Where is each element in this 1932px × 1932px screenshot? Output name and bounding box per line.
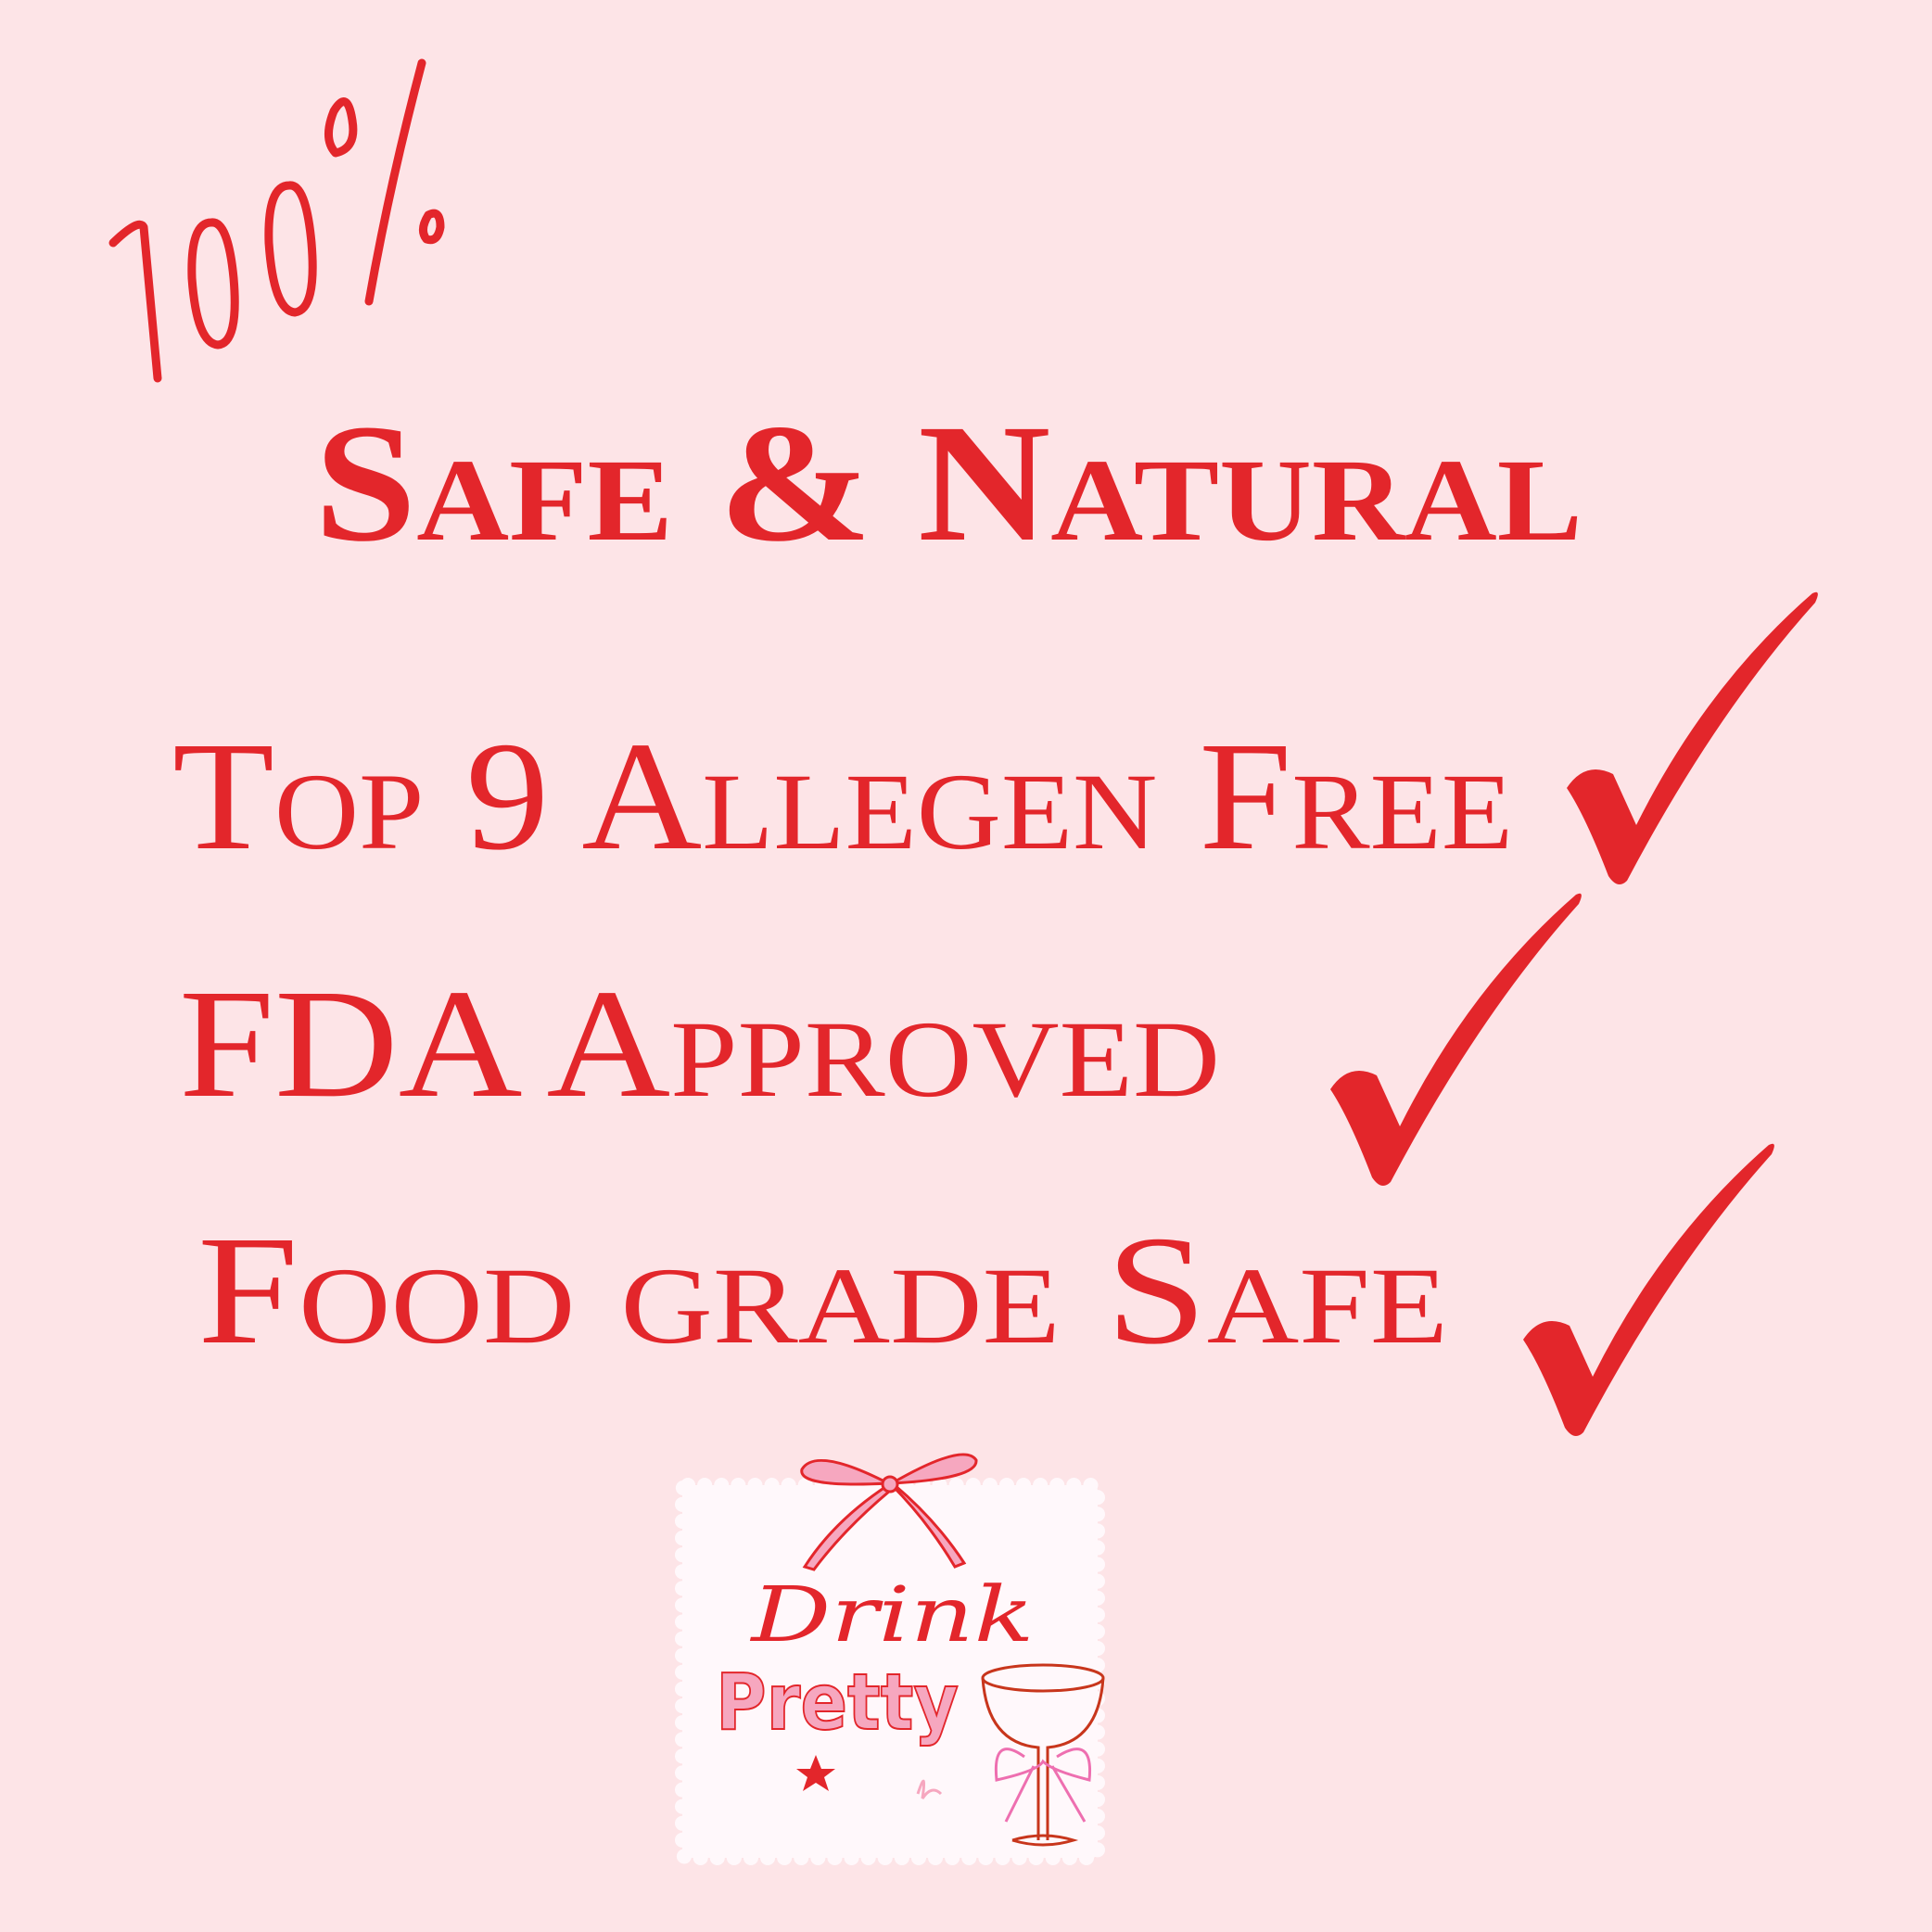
handwritten 100% <box>113 63 440 378</box>
item: Top 9 Allegen Free: Top 9 Allegen Free <box>172 710 1513 883</box>
logo text: Drink: Drink <box>749 1571 1035 1659</box>
icon: coupe glass <box>983 1665 1103 1845</box>
checkmark 1 <box>1567 592 1818 884</box>
item: FDA Approved: FDA Approved <box>179 958 1220 1130</box>
title: Safe & Natural: Safe & Natural <box>314 390 1582 577</box>
checkmark 3 <box>1523 1144 1774 1436</box>
icon: pink bow <box>802 1455 976 1570</box>
logo text: Pretty: Pretty <box>716 1657 959 1748</box>
checkmark 2 <box>1330 894 1582 1186</box>
logo: Drink Pretty <box>682 1455 1103 1858</box>
item: Food grade Safe: Food grade Safe <box>197 1204 1448 1377</box>
icon: star <box>796 1755 835 1791</box>
